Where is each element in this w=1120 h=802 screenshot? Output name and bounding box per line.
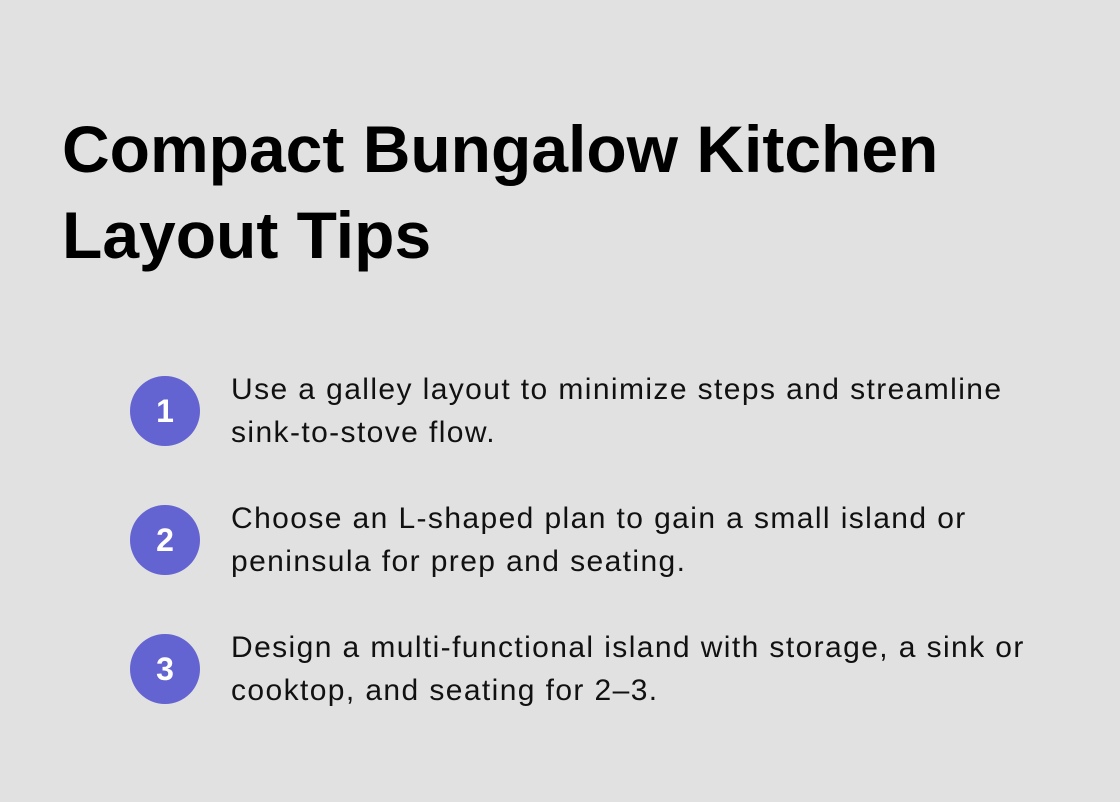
text 1: sink-to-stove flow. — [231, 416, 496, 449]
title: Layout Tips — [62, 198, 431, 272]
title: Compact Bungalow Kitchen — [62, 112, 938, 186]
item 1 — [130, 373, 1002, 449]
text 1: Use a galley layout to minimize steps and streamline — [231, 373, 1002, 406]
text 3: cooktop, and seating for 2–3. — [231, 674, 659, 707]
badge 2: 2 — [156, 522, 174, 558]
item 2 — [130, 502, 967, 578]
text 2: peninsula for prep and seating. — [231, 545, 686, 578]
text 3: Design a multi-functional island with storage, a sink or — [231, 631, 1025, 664]
badge 1: 1 — [156, 393, 174, 429]
text 1 — [231, 373, 1002, 449]
text 2 — [231, 502, 967, 578]
item 3 — [130, 631, 1025, 707]
badge 3 — [130, 634, 200, 704]
text 2: Choose an L-shaped plan to gain a small island or — [231, 502, 967, 535]
title — [62, 112, 938, 272]
badge 3: 3 — [156, 651, 174, 687]
badge 2 — [130, 505, 200, 575]
text 3 — [231, 631, 1025, 707]
badge 1 — [130, 376, 200, 446]
